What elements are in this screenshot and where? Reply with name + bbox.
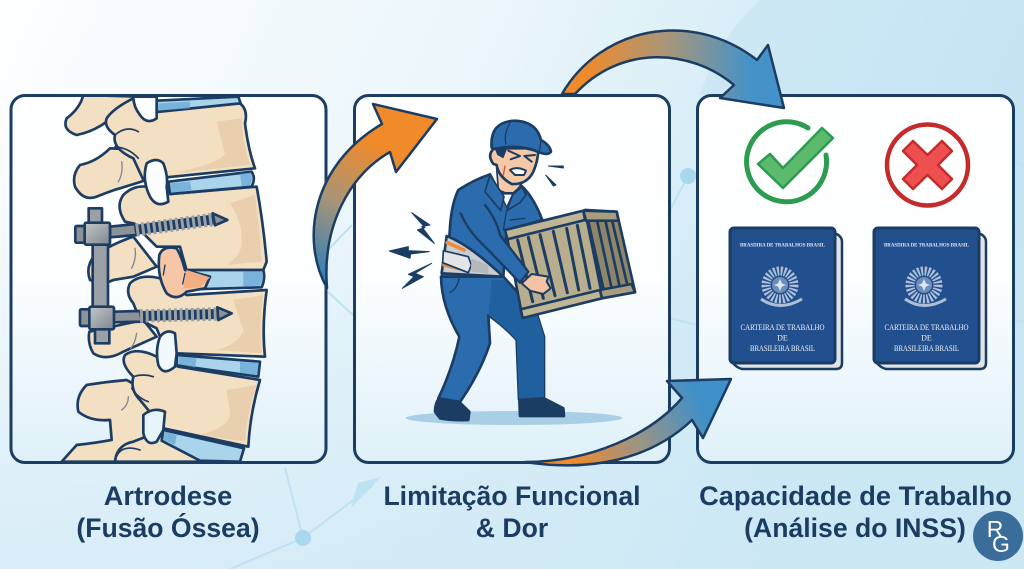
illustration: spine with screws	[62, 95, 267, 462]
heading: fusion subtitle: (Fusão Óssea)	[76, 513, 260, 543]
worker arm and hand	[461, 205, 551, 294]
book: rejected	[874, 228, 986, 369]
book: approved: BRASILEIRA BRASIL	[750, 344, 815, 353]
book: rejected: DE	[921, 334, 932, 342]
heading: fusion: Artrodese	[104, 480, 232, 511]
crate	[505, 210, 635, 318]
hardware: upper screw	[75, 213, 227, 245]
panel: work capacity	[698, 96, 1014, 462]
illustration: worker lifting crate	[389, 121, 635, 425]
logo	[973, 511, 1023, 561]
panel: functional limitation	[354, 96, 670, 462]
back brace	[442, 236, 503, 277]
worker torso	[442, 174, 542, 277]
book: approved	[730, 228, 842, 369]
icon: green check	[747, 122, 833, 202]
book: approved: DE	[777, 334, 788, 342]
logo: R	[987, 516, 1003, 542]
worker head	[490, 121, 551, 184]
icon: red cross	[887, 124, 968, 206]
worker legs	[438, 277, 544, 402]
logo: G	[992, 531, 1010, 557]
arrow: fusion to limitation	[314, 104, 437, 288]
heading: capacity subtitle: (Análise do INSS)	[744, 513, 966, 543]
panel: fusion	[11, 95, 326, 462]
heading: limitation subtitle: & Dor	[476, 513, 548, 543]
book: approved: BRASDIRA DE TRABALHOS BRASIL	[740, 242, 826, 248]
hardware: lower screw	[80, 307, 232, 329]
arrow: limitation to capacity top	[562, 30, 784, 108]
book: rejected: CARTEIRA DE TRABALHO	[884, 323, 969, 332]
book: rejected: BRASDIRA DE TRABALHOS BRASIL	[884, 242, 970, 248]
book: rejected: BRASILEIRA BRASIL	[894, 344, 959, 353]
heading: capacity: Capacidade de Trabalho	[699, 480, 1012, 511]
hardware: rod	[89, 208, 109, 343]
arrow: limitation to capacity bottom	[525, 379, 731, 465]
heading: limitation: Limitação Funcional	[383, 481, 641, 511]
book: approved: CARTEIRA DE TRABALHO	[740, 323, 825, 332]
pain marks	[389, 166, 563, 288]
worker neck	[497, 168, 522, 196]
